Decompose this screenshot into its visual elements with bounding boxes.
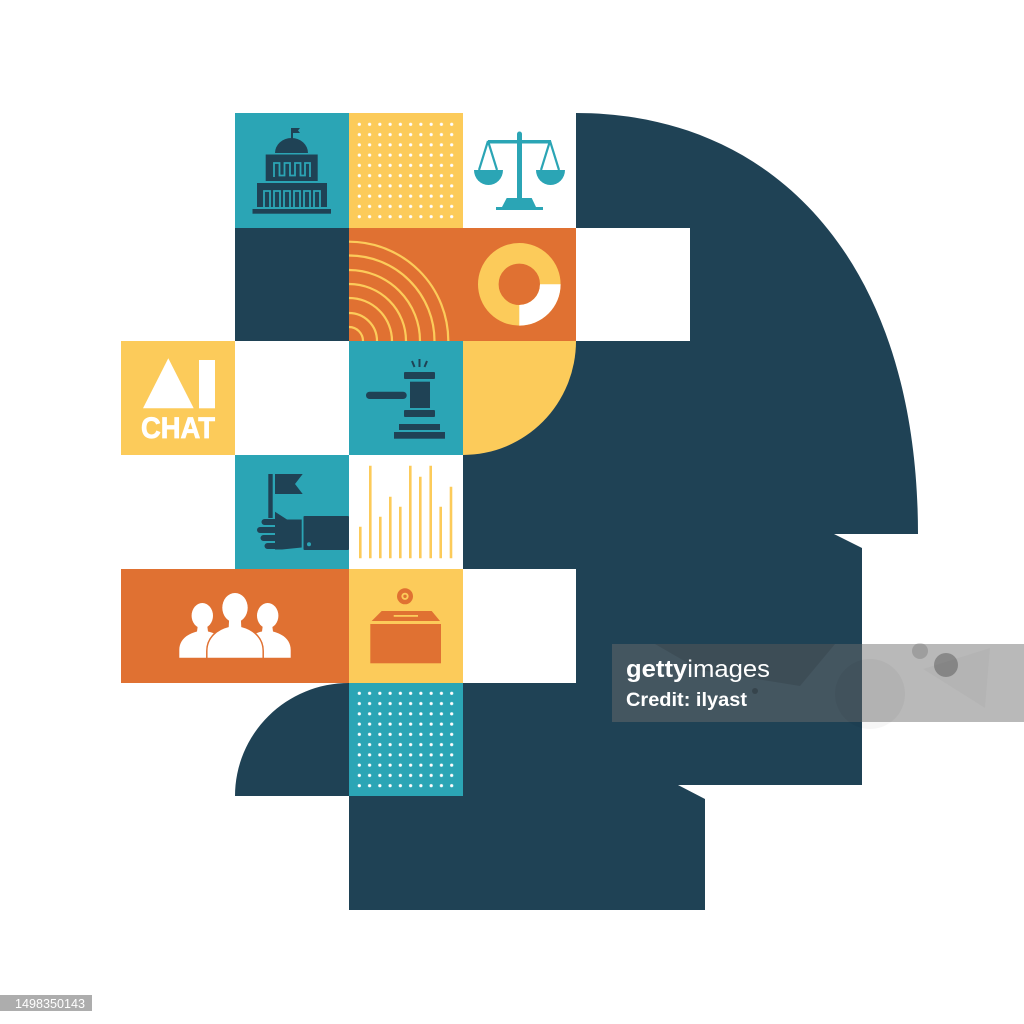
tile: yellow dot pattern	[349, 113, 463, 228]
tile: gavel	[349, 341, 463, 455]
label: chat: CHAT	[141, 412, 215, 445]
tile: white gap	[235, 341, 349, 455]
image id badge: 1498350143	[15, 996, 85, 1011]
head silhouette	[235, 113, 918, 910]
icon: scales	[474, 132, 565, 210]
tile: orange arcs and donut	[349, 228, 576, 341]
icon: capitol	[252, 128, 331, 214]
tile: dark navy	[235, 228, 349, 341]
tile: AI chat	[121, 341, 235, 455]
icon: gavel	[366, 359, 445, 439]
icon: people	[179, 593, 291, 658]
tile: bar chart	[349, 455, 463, 569]
tile: scales of justice	[463, 113, 576, 228]
tile: capitol building	[235, 113, 349, 228]
icon: AI	[143, 358, 215, 408]
tile: ballot box	[349, 569, 463, 683]
donut chart	[488, 253, 561, 326]
icon: hand and flag	[260, 474, 349, 550]
tile: white gap	[576, 228, 690, 341]
bars	[360, 466, 451, 558]
tile: hand holding flag	[235, 455, 349, 569]
credit text: Credit: ilyast	[626, 690, 748, 711]
tile: yellow quarter circle	[463, 341, 576, 455]
arcs	[349, 242, 448, 341]
tile: teal dot pattern	[349, 683, 463, 796]
watermark: getty images	[612, 643, 1024, 729]
tile: people	[121, 569, 349, 683]
icon: ballot box	[370, 588, 441, 663]
tile: white gap	[463, 569, 576, 683]
watermark text: gettyimages	[626, 656, 770, 683]
